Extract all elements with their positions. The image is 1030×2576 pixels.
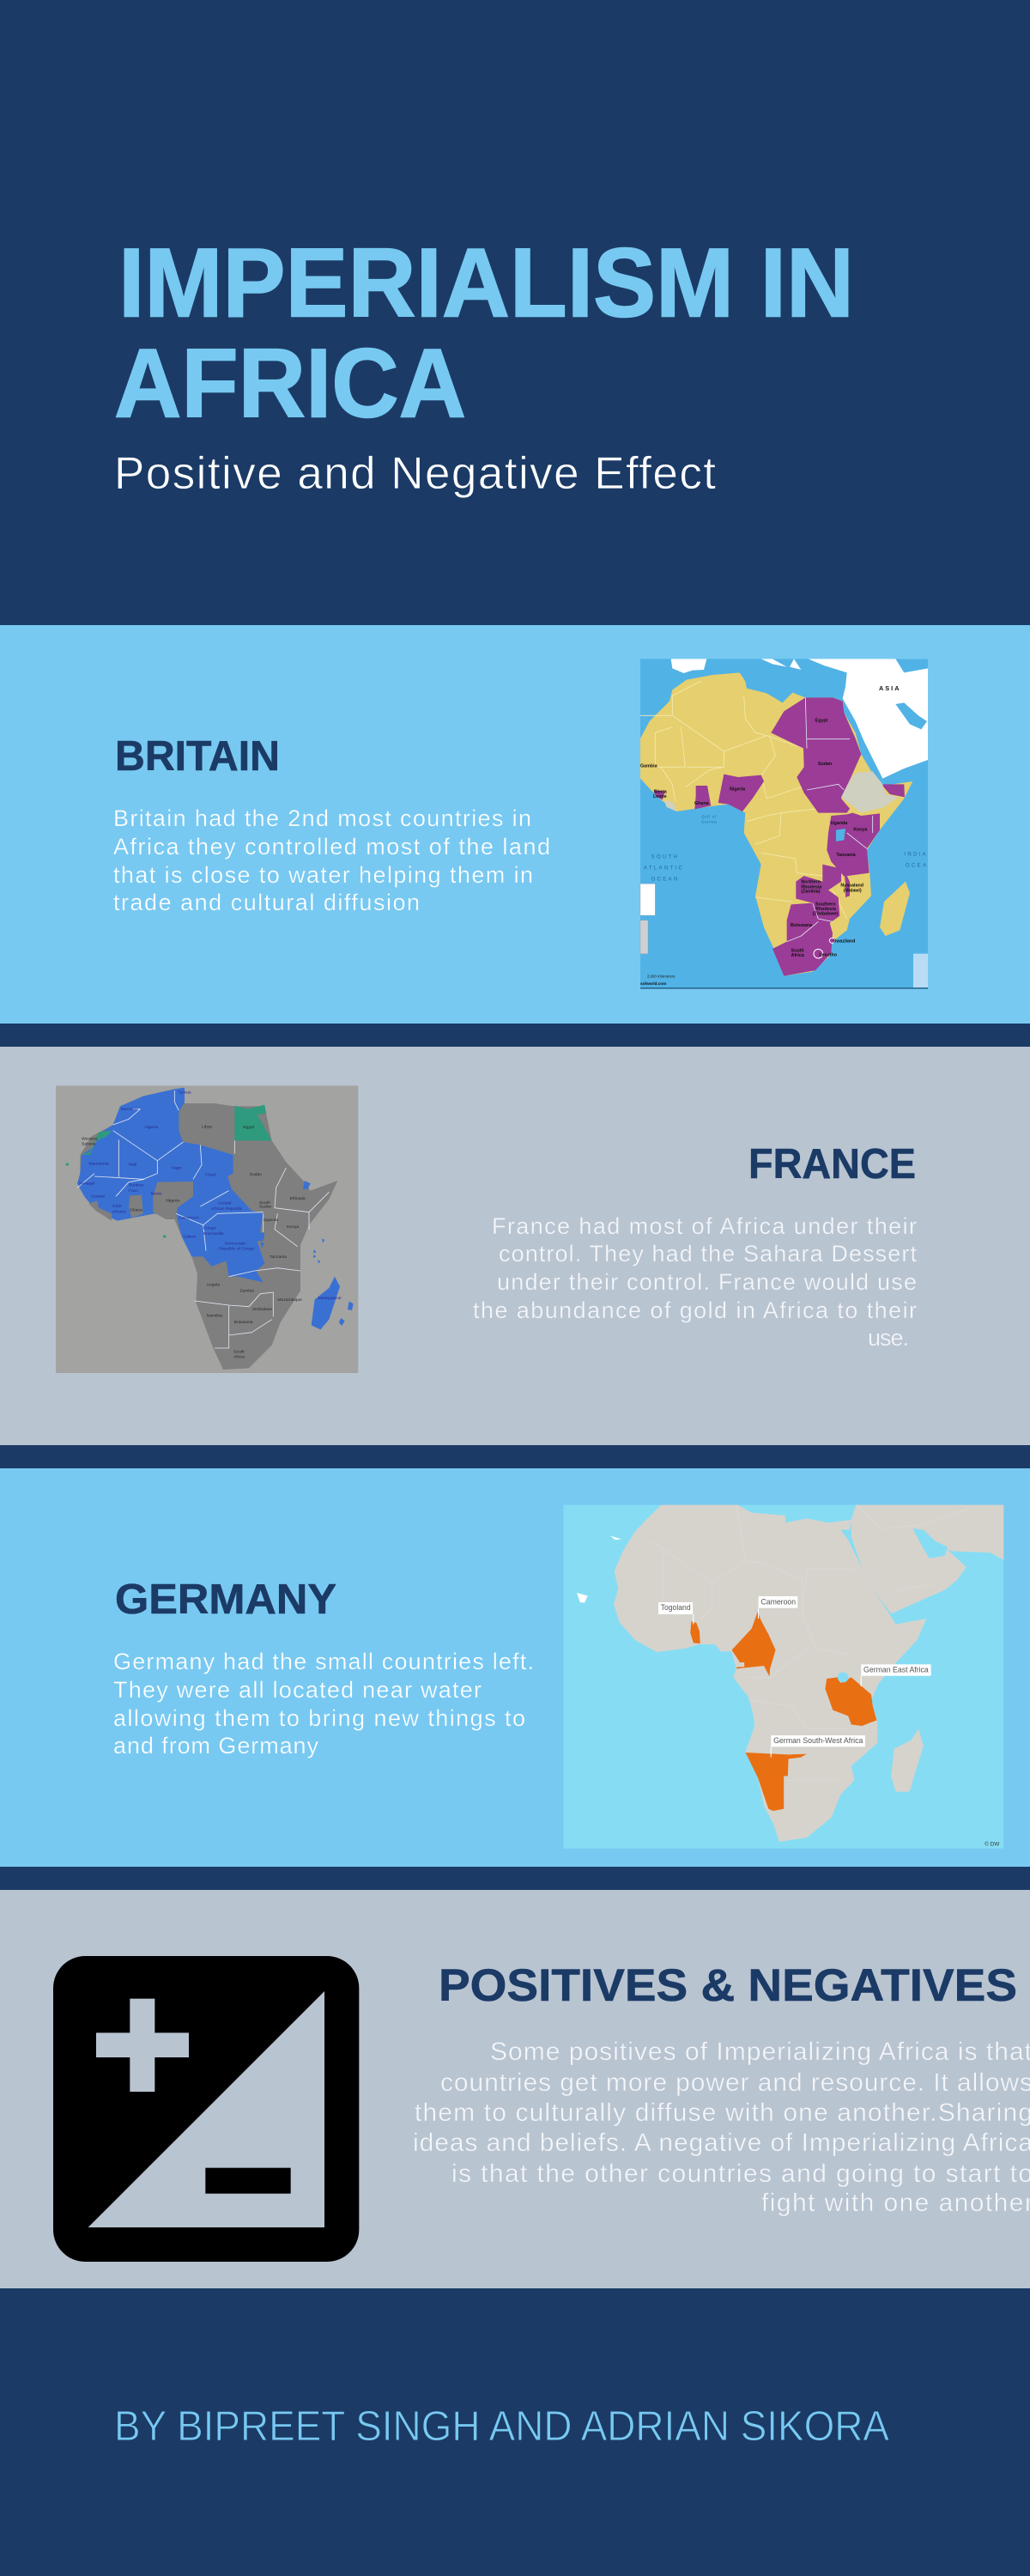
text: Britain description: that is close to water helping them in <box>113 862 533 888</box>
map: British colonies in Africa: Africa <box>791 953 804 958</box>
map: French colonies in Africa: Mozambique <box>277 1297 302 1303</box>
map: French colonies in Africa: Niger <box>172 1166 182 1171</box>
map: British colonies in Africa: Northern <box>801 880 821 885</box>
text: Germany description: They were all located near water <box>113 1677 482 1703</box>
map: French colonies in Africa: Chad <box>205 1172 215 1177</box>
text: positives and negatives description: is that the other countries and going to start to <box>451 2160 1030 2188</box>
map: French colonies in Africa: Nigeria <box>166 1199 179 1204</box>
map: British colonies in Africa: Ghana <box>694 801 709 806</box>
map: French colonies in Africa: African Republic <box>211 1206 243 1212</box>
map: British colonies in Africa: Southern <box>815 902 835 907</box>
map: French colonies in Africa: Zambia <box>239 1288 254 1293</box>
map: French colonies in Africa: South <box>259 1200 270 1206</box>
map: French colonies in Africa: Namibia <box>207 1313 222 1318</box>
map: French colonies in Africa: Cameroon <box>179 1215 199 1220</box>
map: French colonies in Africa: Congo <box>203 1226 216 1231</box>
map: French colonies in Africa: Botswana <box>234 1320 253 1325</box>
map: British colonies in Africa: Swaziland <box>833 939 855 945</box>
map: French colonies in Africa: Gabon <box>183 1235 197 1240</box>
map: British colonies in Africa: Sierra <box>654 789 667 794</box>
heading: France: FRANCE <box>748 1141 916 1188</box>
map: British colonies in Africa: Nigeria <box>730 787 745 793</box>
heading: Britain: BRITAIN <box>115 733 280 780</box>
map: German colonies in Africa: Togoland <box>661 1603 691 1612</box>
map: German colonies in Africa: © DW <box>985 1842 999 1847</box>
map: French colonies in Africa: Egypt <box>243 1125 255 1130</box>
map: British colonies in Africa: Nyasaland <box>840 884 863 889</box>
map: British colonies in Africa: SOUTH <box>651 854 679 860</box>
map: German colonies in Africa: German East Africa <box>863 1666 930 1674</box>
map: French colonies in Africa: Guinea <box>91 1194 105 1200</box>
text: positives and negatives description: Some positives of Imperializing Africa is that <box>490 2038 1030 2066</box>
map: French colonies in Africa: South <box>233 1349 245 1354</box>
map: French colonies in Africa: Sudan <box>259 1205 272 1210</box>
map: French colonies in Africa: Mali <box>129 1162 136 1167</box>
text: Germany description: and from Germany <box>113 1733 319 1759</box>
map: British colonies in Africa: OCEA <box>906 864 928 869</box>
map: French colonies in Africa: Mauritania <box>88 1162 109 1167</box>
map: British colonies in Africa: Rhodesia <box>801 884 821 890</box>
panel: Britain <box>0 625 1030 1024</box>
map: French colonies in Africa: Kenya <box>287 1224 299 1230</box>
map: French colonies in Africa: Faso <box>129 1188 138 1194</box>
map: British colonies in Africa: Leone <box>653 794 667 799</box>
map: German colonies in Africa: Cameroon <box>760 1598 796 1606</box>
map: French colonies in Africa: Algeria <box>144 1125 158 1130</box>
text: France description: use. <box>868 1325 909 1351</box>
map: French colonies in Africa: Brazzaville <box>203 1231 224 1236</box>
map: British colonies in Africa: Gambia <box>640 764 657 769</box>
map: French colonies in Africa: Benin <box>151 1192 162 1197</box>
heading: positives and negatives: POSITIVES & NEGATIVES <box>439 1960 1017 2011</box>
map: British colonies in Africa: sofworld.com <box>640 981 666 986</box>
map: British colonies in Africa: Tanzania <box>836 853 856 858</box>
panel: Germany <box>0 1468 1030 1867</box>
map: British colonies in Africa: Gulf of <box>701 814 717 818</box>
map: British colonies in Africa <box>640 659 928 989</box>
map: German colonies in Africa <box>563 1505 1003 1849</box>
text: positives and negatives description: countries get more power and resource. It allows <box>440 2069 1030 2097</box>
map: British colonies in Africa: Guinea <box>701 819 717 823</box>
map: British colonies in Africa: Sudan <box>818 762 832 767</box>
map: French colonies in Africa: Sudan <box>250 1172 262 1177</box>
map: British colonies in Africa: Lesotho <box>819 953 838 958</box>
map: British colonies in Africa: Rhodesia <box>815 907 836 912</box>
map: French colonies in Africa: Republic of Congo <box>219 1247 254 1252</box>
map: French colonies in Africa: Sahara <box>82 1141 95 1146</box>
footer: authors: BY BIPREET SINGH AND ADRIAN SIKORA <box>114 2403 889 2450</box>
map: British colonies in Africa: ATLANTIC <box>644 866 684 871</box>
map: British colonies in Africa: (Zambia) <box>801 890 821 895</box>
map: French colonies in Africa: Ghana <box>130 1208 142 1213</box>
map: British colonies in Africa: Uganda <box>831 821 847 826</box>
map: British colonies in Africa: Kenya <box>853 827 867 832</box>
map: British colonies in Africa: Botswana <box>791 923 812 928</box>
map: French colonies in Africa: Ethiopia <box>290 1196 306 1201</box>
map: French colonies in Africa: Tanzania <box>270 1255 287 1260</box>
subtitle: Positive and Negative Effect <box>114 448 716 499</box>
map: French colonies in Africa: Zimbabwe <box>252 1307 272 1312</box>
map: British colonies in Africa: OCEAN <box>651 877 680 882</box>
text: Germany description: Germany had the small countries left. <box>113 1649 534 1674</box>
map: French colonies in Africa: Democratic <box>225 1241 246 1246</box>
text: Germany description: allowing them to bring new things to <box>113 1705 525 1731</box>
map: British colonies in Africa: (Malawi) <box>844 888 862 893</box>
heading: Germany: GERMANY <box>115 1577 336 1623</box>
map: French colonies in Africa: Libya <box>202 1124 212 1129</box>
map: British colonies in Africa: 2,000 Kilometers <box>647 974 675 978</box>
map: British colonies in Africa: South <box>791 948 804 953</box>
map: French colonies in Africa <box>56 1085 358 1373</box>
text: France description: under their control. France would use <box>497 1269 917 1295</box>
title: AFRICA <box>114 330 466 438</box>
map: French colonies in Africa: Western <box>82 1136 98 1141</box>
map: French colonies in Africa: Angola <box>207 1282 220 1287</box>
map: German colonies in Africa: German South-West Africa <box>773 1736 863 1745</box>
map: French colonies in Africa: Senegal <box>79 1181 94 1186</box>
text: positives and negatives description: ideas and beliefs. A negative of Imperializing Africa <box>413 2129 1030 2157</box>
header: title and subtitle <box>114 228 854 499</box>
map: British colonies in Africa: INDIA <box>904 853 928 858</box>
text: Britain description: trade and cultural diffusion <box>113 890 420 915</box>
map: French colonies in Africa: d'Ivoire <box>112 1209 126 1214</box>
map: French colonies in Africa: Côte <box>112 1204 122 1209</box>
map: French colonies in Africa: Burkina <box>129 1183 143 1188</box>
map: British colonies in Africa: Egypt <box>815 719 828 724</box>
title: IMPERIALISM IN <box>118 228 854 338</box>
text: France description: the abundance of gold in Africa to their <box>473 1297 917 1323</box>
text: Britain description: Africa they controlled most of the land <box>113 834 550 860</box>
panel: France <box>0 1047 1030 1445</box>
map: French colonies in Africa: Uganda <box>264 1218 278 1223</box>
map: French colonies in Africa: Madagascar <box>318 1296 342 1301</box>
map: French colonies in Africa: Central <box>217 1201 231 1206</box>
text: France description: control. They had the Sahara Dessert <box>499 1241 917 1267</box>
panel: positives and negatives <box>0 1890 1030 2288</box>
map: French colonies in Africa: Africa <box>233 1355 245 1360</box>
text: France description: France had most of Africa under their <box>492 1213 917 1239</box>
map: French colonies in Africa: Tunisia <box>178 1090 191 1095</box>
map: British colonies in Africa: (Zimbabwe) <box>813 911 838 916</box>
text: positives and negatives description: them to culturally diffuse with one another.Sharing <box>415 2099 1030 2127</box>
map: French colonies in Africa: Morocco <box>121 1107 137 1112</box>
map: British colonies in Africa: ASIA <box>879 684 901 692</box>
text: Britain description: Britain had the 2nd most countries in <box>113 805 531 831</box>
icon: plus minus contrast <box>53 1956 359 2262</box>
